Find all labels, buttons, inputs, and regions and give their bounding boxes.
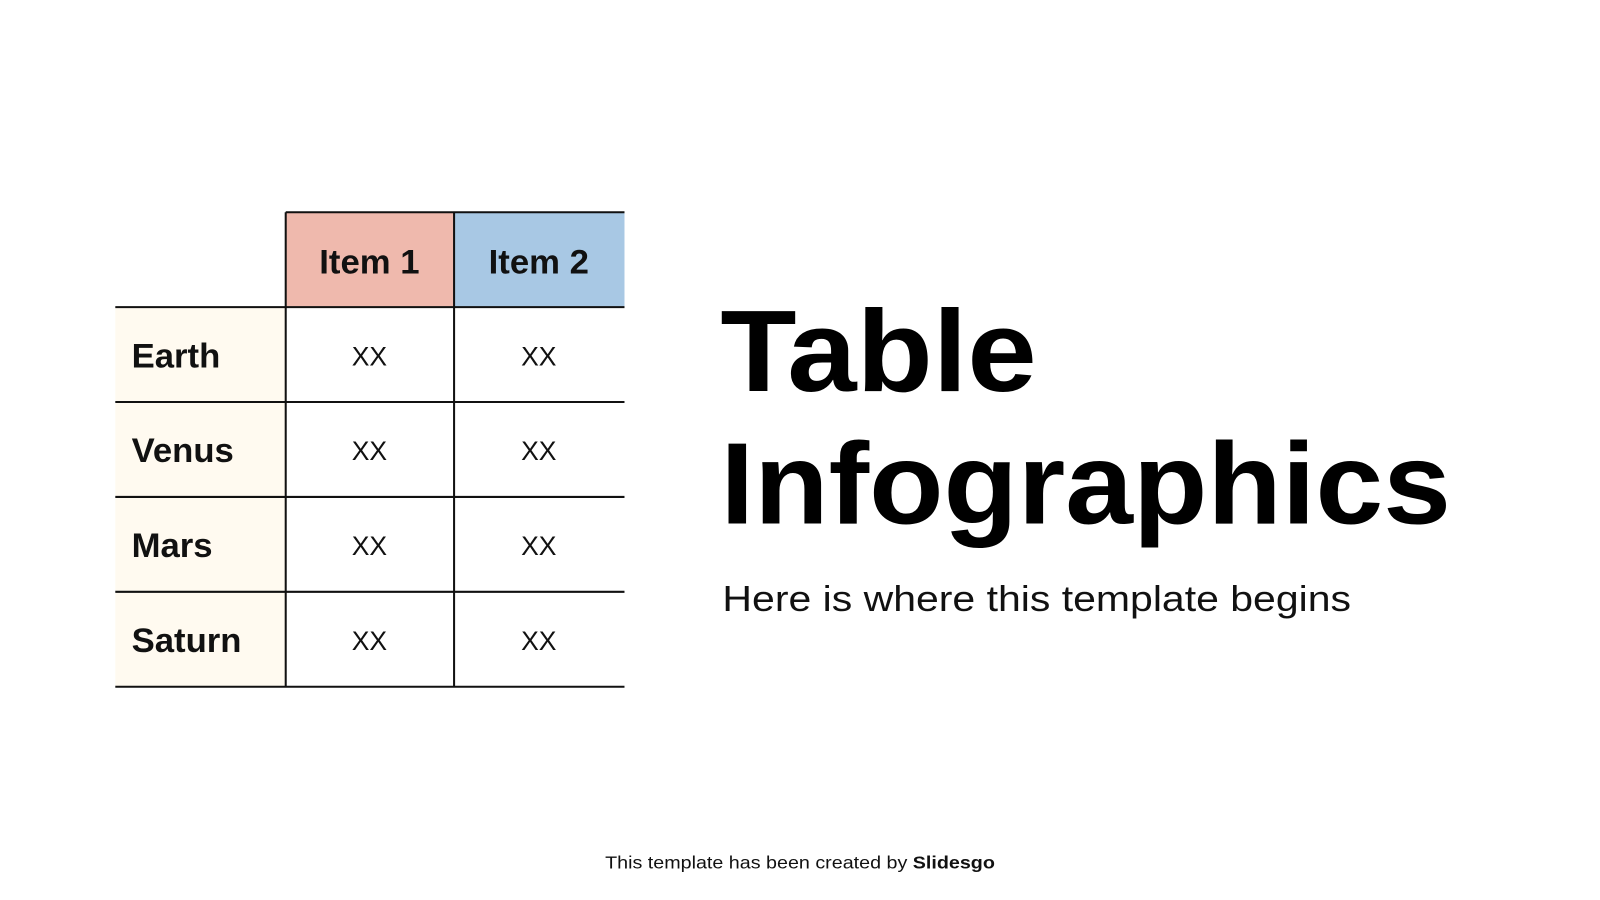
row label column background bbox=[115, 307, 286, 687]
row: Venus: XX bbox=[521, 436, 557, 466]
row: Saturn: XX bbox=[521, 626, 557, 656]
row: Mars: XX bbox=[352, 531, 387, 561]
header cell: Item 2 bbox=[454, 212, 624, 307]
row: Saturn bbox=[132, 622, 557, 660]
row: Venus: Venus bbox=[132, 432, 234, 470]
row: Earth bbox=[132, 337, 557, 375]
row: Mars: Mars bbox=[132, 527, 213, 565]
row: Earth: XX bbox=[521, 341, 557, 371]
row: Venus: XX bbox=[352, 436, 387, 466]
header cell: Item 1 bbox=[286, 212, 454, 307]
title: Table bbox=[720, 286, 1037, 416]
row: Venus bbox=[132, 432, 557, 470]
title bbox=[720, 286, 1451, 548]
footer credit: This template has been created by Slidesgo bbox=[605, 852, 995, 872]
header cell: Item 2: Item 2 bbox=[489, 243, 589, 281]
table bbox=[115, 212, 624, 687]
row: Mars: XX bbox=[521, 531, 557, 561]
row: Earth: XX bbox=[352, 341, 387, 371]
header cell: Item 1: Item 1 bbox=[319, 243, 420, 281]
title: Infographics bbox=[720, 418, 1451, 548]
row: Mars bbox=[132, 527, 557, 565]
row: Saturn: XX bbox=[352, 626, 387, 656]
row: Earth: Earth bbox=[132, 337, 220, 375]
row: Saturn: Saturn bbox=[132, 622, 241, 660]
subtitle: Here is where this template begins bbox=[722, 579, 1351, 619]
